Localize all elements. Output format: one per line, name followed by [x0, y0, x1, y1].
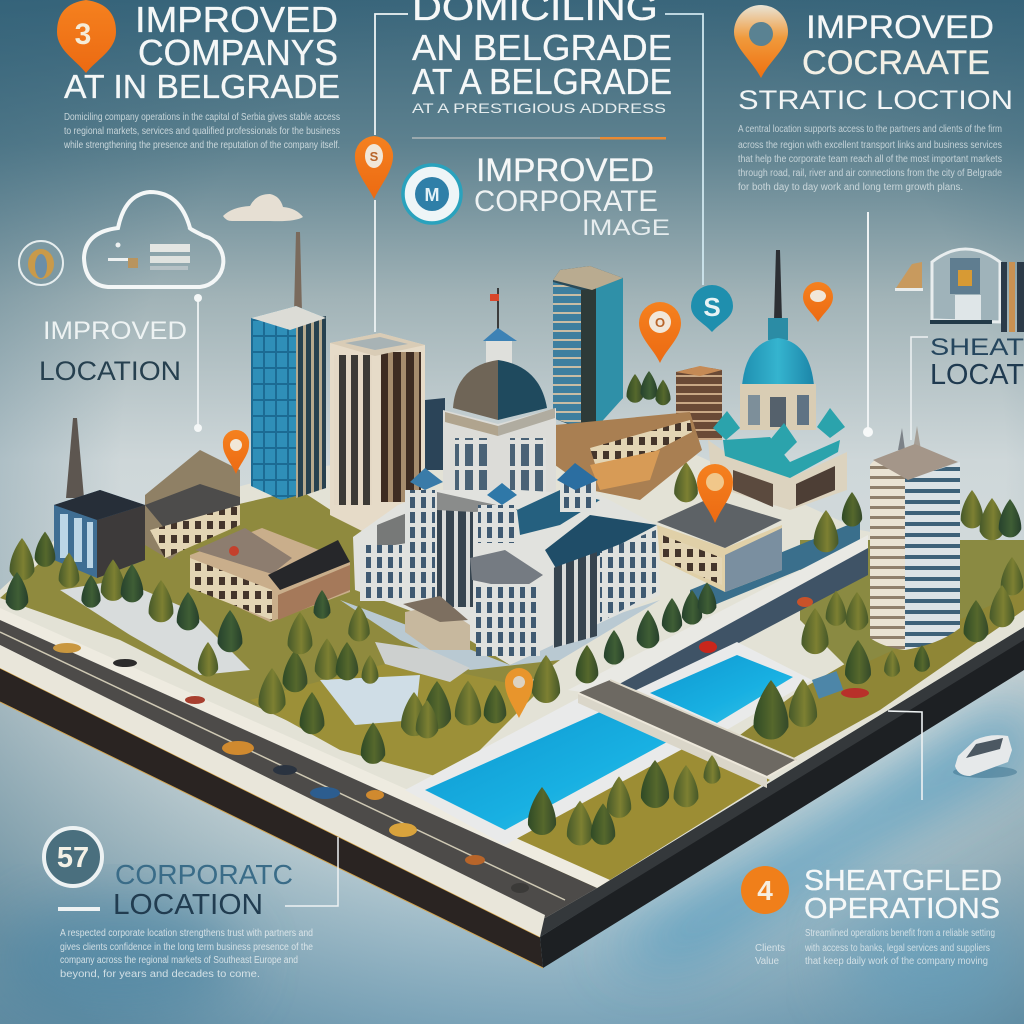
- icon: round badge: M: [424, 185, 440, 205]
- heading: [113, 859, 293, 921]
- pin: orange centre right: O: [655, 315, 665, 330]
- tower: dark glass background skyscraper: [553, 266, 623, 432]
- heading: IMPROVED: [476, 152, 654, 188]
- icon: building thumbnail: [895, 249, 1024, 332]
- body text: Clients: [755, 943, 785, 954]
- callout: left cloud improved location: [19, 192, 303, 432]
- building: left low office: [54, 418, 240, 578]
- trees: foreground: [6, 532, 1014, 845]
- icon: gold circle badge: [19, 241, 63, 285]
- trees: background: [627, 371, 1023, 595]
- icon: orange circle: [741, 866, 789, 914]
- heading: [930, 334, 1024, 391]
- map pins: [223, 136, 833, 718]
- pin: teal: [691, 285, 733, 332]
- heading: COMPANYS: [138, 32, 338, 73]
- heading: [804, 865, 1002, 925]
- heading: [474, 152, 670, 240]
- heading: [412, 0, 672, 102]
- heading: LOCAT: [930, 359, 1024, 391]
- ground: grass and paving: [0, 490, 1024, 888]
- heading: IMPROVED: [806, 9, 994, 45]
- upper road: [568, 535, 868, 700]
- pin: garden: [505, 668, 533, 718]
- callout: improved corporate image: [403, 152, 670, 240]
- pin: orange centre right: [639, 302, 681, 363]
- heading: IMPROVED: [135, 0, 338, 40]
- icon: number badge: 57: [57, 842, 89, 874]
- pin: top centre: S: [370, 149, 379, 164]
- heading: AT A BELGRADE: [412, 61, 672, 102]
- heading: LOCATION: [39, 356, 181, 386]
- body text: to regional markets, services and qualified professionals for the business: [64, 126, 340, 137]
- building: right annex: [657, 498, 782, 592]
- heading: IMAGE: [582, 215, 670, 240]
- body text: [60, 928, 313, 980]
- body text: [755, 928, 995, 967]
- building: central government palace: [353, 288, 660, 682]
- heading: [738, 9, 1013, 115]
- body text: gives clients confidence in the long term business presence of the: [60, 942, 313, 953]
- heading: [64, 0, 340, 105]
- callout: top-right heading: [734, 5, 1013, 193]
- heading: [39, 317, 187, 386]
- body text: Domiciling company operations in the capital of Serbia gives stable access: [64, 112, 340, 123]
- body text: [63, 112, 340, 151]
- icon: cloud outline: [84, 192, 223, 287]
- icon: orange pin 3: [57, 0, 116, 73]
- icon: orange circle: 4: [757, 875, 773, 906]
- heading: LOCATION: [113, 889, 263, 921]
- body text: beyond, for years and decades to come.: [60, 969, 260, 980]
- heading: SHEAT: [930, 334, 1024, 361]
- tower: white striped round tower: [870, 426, 960, 650]
- icon: round badge: [403, 165, 461, 223]
- body text: that keep daily work of the company moving: [805, 956, 988, 967]
- heading: SHEATGFLED: [804, 865, 1002, 897]
- road: [0, 608, 610, 937]
- icon: orange ring pin: [734, 5, 788, 78]
- wings mass: [353, 490, 660, 665]
- icon: orange pin 3: 3: [75, 18, 91, 51]
- heading: COCRAATE: [802, 44, 990, 82]
- callout: top-left heading: [57, 0, 340, 151]
- city platform: [0, 420, 1024, 968]
- callout: bottom-left corporate location: [44, 828, 338, 980]
- body text: Value: [755, 956, 779, 967]
- car: parked silver: [953, 735, 1017, 778]
- callout: right sheared location: [863, 212, 1024, 440]
- body text: [738, 124, 1002, 193]
- body text: with access to banks, legal services and suppliers: [804, 943, 990, 954]
- body text: company across the regional markets of Southeast Europe and: [60, 955, 298, 966]
- heading: IMPROVED: [43, 317, 187, 345]
- pin: right small: [803, 282, 833, 322]
- building: teal domed palace: [708, 250, 847, 510]
- icon: number badge: [44, 828, 102, 886]
- pin: teal: S: [703, 292, 721, 322]
- body text: for both day to day work and long term growth plans.: [738, 182, 963, 193]
- far left wing roof: [377, 513, 407, 548]
- heading: AN BELGRADE: [412, 27, 672, 68]
- heading: AT IN BELGRADE: [64, 68, 340, 105]
- tower: striped brown building: [330, 333, 425, 535]
- icon: small cloud: [223, 194, 303, 221]
- body text: A respected corporate location strengthens trust with partners and: [60, 928, 313, 939]
- body text: while strengthening the presence and the reputation of the company itself.: [63, 140, 340, 151]
- pin: left small: [223, 430, 249, 474]
- callout: top-centre heading: [375, 0, 703, 332]
- heading: CORPORATE: [474, 185, 658, 218]
- pin: annex: [697, 464, 733, 523]
- heading: OPERATIONS: [804, 893, 1000, 925]
- callout: bottom-right operations: [741, 711, 1002, 967]
- building: background brick block: [425, 366, 722, 500]
- pin: top centre: [355, 136, 393, 199]
- heading: STRATIC LOCTION: [738, 85, 1013, 115]
- subheading: AT A PRESTIGIOUS ADDRESS: [412, 100, 666, 116]
- river with bridge: [405, 642, 812, 845]
- tower: left blue glass skyscraper: [251, 232, 326, 500]
- heading: CORPORATC: [115, 859, 293, 890]
- building: brown classical hall: [190, 528, 350, 622]
